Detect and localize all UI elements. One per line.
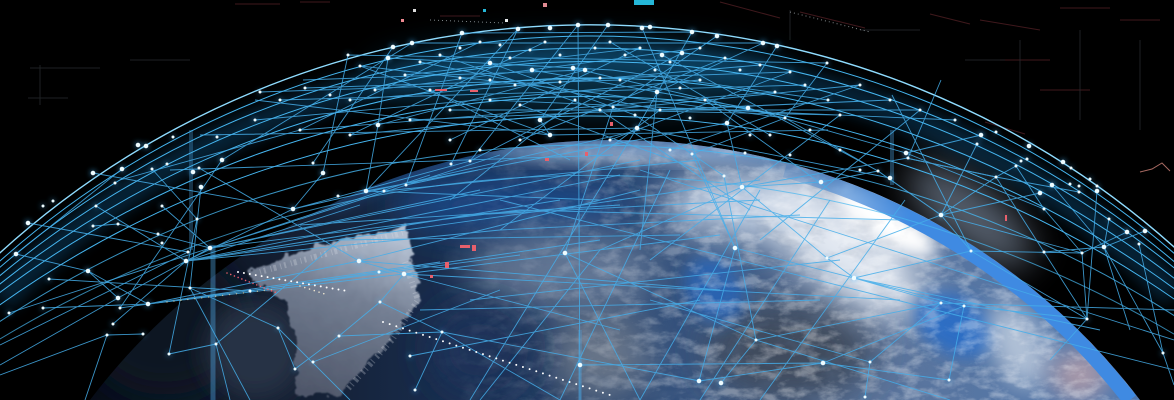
- background: faint data marks: [28, 2, 1170, 172]
- background: small markers: [401, 3, 547, 22]
- earth: far east clouds: [975, 293, 1061, 397]
- earth: dark broken texture: [516, 220, 906, 396]
- earth: cloud texture: [462, 141, 1140, 400]
- background: cyan marker block: [634, 0, 654, 5]
- nodes: dense top field: [255, 42, 955, 170]
- glow: dense top of network: [370, 44, 790, 112]
- earth: east pink land: [1050, 350, 1110, 400]
- earth: dark land south of mass: [205, 300, 305, 400]
- earth: base: [90, 140, 1150, 400]
- earth: dark left shade: [118, 292, 225, 370]
- glow: haze beyond Earth limb: [892, 145, 1048, 285]
- glow: network shell band: [0, 55, 1174, 300]
- earth: central grey clouds: [465, 230, 655, 310]
- earth: blue top limb: [330, 140, 790, 205]
- earth: speckled coast: [260, 232, 418, 392]
- earth: east ocean: [905, 284, 994, 364]
- earth: limb highlight: [824, 173, 946, 271]
- earth: west ice field: [665, 173, 825, 237]
- earth: blue right limb: [785, 170, 1130, 400]
- earth: grey landmass: [247, 227, 420, 395]
- earth: blue ocean bay: [678, 252, 752, 332]
- network: dotted light trails: [167, 272, 610, 395]
- light beams: [191, 130, 892, 400]
- earth: broad white clouds: [744, 158, 946, 342]
- earth: [85, 140, 1150, 400]
- earth: upper ocean tint: [390, 177, 630, 233]
- earth: dark land lower right: [705, 300, 875, 400]
- earth: top atmosphere haze: [490, 142, 790, 162]
- red data specks: [430, 89, 1007, 278]
- earth: lower central grey: [550, 310, 650, 400]
- earth: navy water lower mid: [442, 288, 535, 366]
